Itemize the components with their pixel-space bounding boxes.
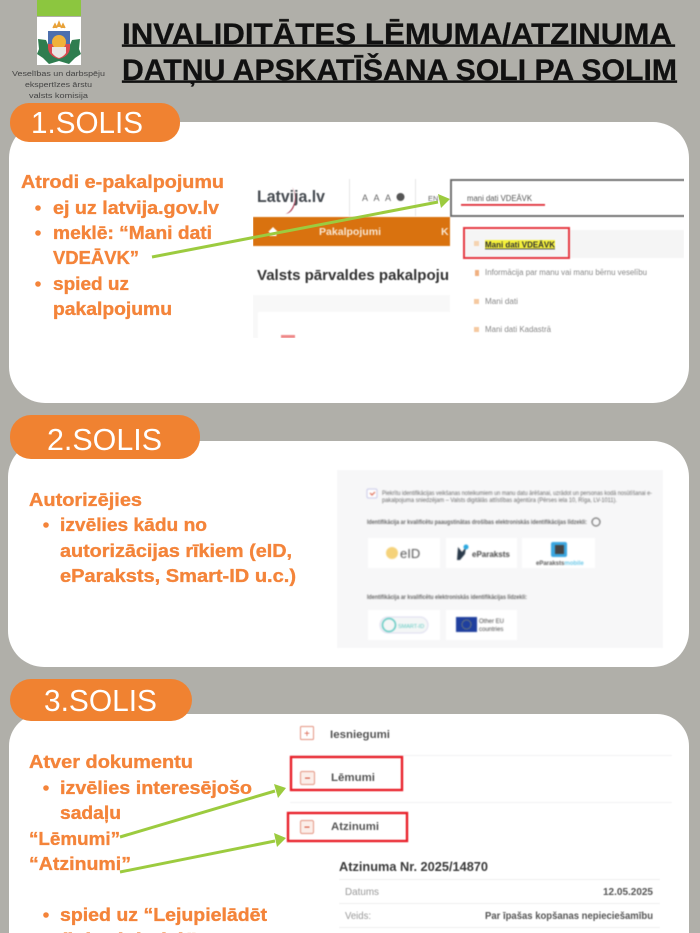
step 3 text: “Lēmumi”	[29, 829, 120, 849]
panel: step 1	[9, 122, 691, 403]
screenshot: authorisation tools: Identifikācija ar kvalificētu elektroniskās identifikācijas līdzekli:	[367, 595, 527, 601]
screenshot: documents list: 12.05.2025	[603, 886, 653, 898]
screenshot: latvija.lv search: EN	[428, 194, 438, 203]
screenshot: latvija.lv search: Valsts pārvaldes pakalpoju	[257, 267, 449, 284]
step 2 text: Autorizējies	[29, 490, 142, 510]
title	[122, 18, 677, 87]
screenshot: documents list: Par īpašas kopšanas nepieciešamību	[485, 910, 653, 922]
screenshot: latvija.lv search: mani dati VDEĀVK	[467, 194, 533, 203]
screenshot: latvija.lv search	[253, 178, 691, 338]
screenshot: latvija.lv search: Mani dati Kadastrā	[485, 325, 552, 334]
logo: latvian coat of arms	[37, 0, 81, 65]
screenshot: documents list: Lēmumi	[331, 772, 375, 784]
screenshot: authorisation tools: Identifikācija ar kvalificētu paaugstinātas drošības elektroniskās identifikācijas līdzekli:	[367, 520, 587, 526]
screenshot: documents list	[288, 726, 672, 928]
logo caption	[12, 69, 105, 100]
step 1 text: ej uz latvija.gov.lv	[53, 198, 219, 218]
step 3 text: spied uz “Lejupielādēt	[60, 905, 267, 925]
screenshot: documents list: +	[304, 729, 310, 740]
step 1 badge	[10, 103, 180, 142]
screenshot: documents list: Datums	[345, 886, 379, 898]
screenshot: documents list: Iesniegumi	[330, 729, 390, 741]
panel background 2	[8, 441, 689, 667]
step 1 text: spied uz	[53, 274, 129, 294]
screenshot: authorisation tools: pakalpojuma sniedzējam – Valsts digitālās attīstības aģentūra (Pērses iela 10, Rīga, LV-1011).	[382, 497, 617, 504]
screenshot: latvija.lv search: Mani dati VDEĀVK	[485, 240, 555, 250]
arrow to search box	[152, 194, 450, 257]
screenshot: documents list: Atzinuma Nr. 2025/14870	[339, 859, 488, 874]
step 3 text: sadaļu	[60, 803, 121, 823]
logo caption: ekspertīzes ārstu	[25, 80, 92, 89]
screenshot: authorisation tools: SMART-ID	[398, 624, 424, 630]
step 2 text: izvēlies kādu no	[60, 515, 207, 535]
title: DATŅU APSKATĪŠANA SOLI PA SOLIM	[122, 53, 677, 87]
step 3 text: Atver dokumentu	[29, 752, 193, 772]
screenshot: authorisation tools: countries	[479, 627, 503, 633]
step 3 text	[29, 752, 267, 933]
arrow to Lēmumi	[120, 784, 286, 837]
screenshot: documents list: Veids:	[345, 910, 371, 922]
step 1 text: Atrodi e-pakalpojumu	[21, 172, 224, 192]
panel background 1	[9, 122, 689, 403]
screenshot: authorisation tools: Other EU	[479, 619, 504, 625]
step 1 text: meklē: “Mani dati	[53, 223, 212, 243]
screenshot: latvija.lv search: Mani dati	[485, 297, 518, 306]
panel background 3	[9, 714, 689, 933]
step 2 text: autorizācijas rīkiem (eID,	[60, 541, 292, 561]
title: INVALIDITĀTES LĒMUMA/ATZINUMA	[122, 18, 672, 51]
panel: step 2	[8, 441, 689, 667]
step 3 text: “Atzinumi”	[29, 854, 131, 874]
screenshot: latvija.lv search: Informācija par manu vai manu bērnu veselību	[485, 268, 647, 277]
screenshot: authorisation tools: Piekrītu identifikācijas veikšanas noteikumiem un manu datu ārēšanai, uzrādot un personas kodā nosūtīšanai e-	[382, 491, 652, 497]
panel: step 3	[9, 714, 689, 933]
screenshot: latvija.lv search: K	[441, 226, 449, 238]
screenshot: authorisation tools: eID	[400, 546, 420, 561]
step 1 badge: 1.SOLIS	[31, 105, 143, 140]
step 2 text: eParaksts, Smart-ID u.c.)	[60, 566, 296, 586]
step 2 badge: 2.SOLIS	[47, 422, 162, 457]
step 3 badge: 3.SOLIS	[44, 683, 157, 718]
step 3 badge	[10, 679, 192, 721]
logo caption: Veselības un darbspēju	[12, 69, 105, 78]
step 2 text	[29, 490, 296, 586]
screenshot: authorisation tools	[337, 470, 663, 648]
step 1 text: VDEĀVK”	[53, 248, 139, 268]
screenshot: authorisation tools: eParakstsmobile	[536, 561, 584, 567]
screenshot: latvija.lv search: A A A	[362, 193, 393, 203]
screenshot: documents list: Atzinumi	[331, 821, 379, 833]
step 3 text: izvēlies interesējošo	[60, 778, 252, 798]
arrow to Atzinumi	[120, 833, 286, 872]
step 2 badge	[10, 415, 200, 459]
screenshot: latvija.lv search: Pakalpojumi	[319, 226, 381, 238]
logo caption: valsts komisija	[29, 91, 89, 100]
screenshot: latvija.lv search: Latvija.lv	[257, 187, 326, 206]
step 1 text	[21, 172, 224, 319]
step 1 text: pakalpojumu	[53, 299, 172, 319]
screenshot: authorisation tools: eParaksts	[472, 550, 510, 559]
